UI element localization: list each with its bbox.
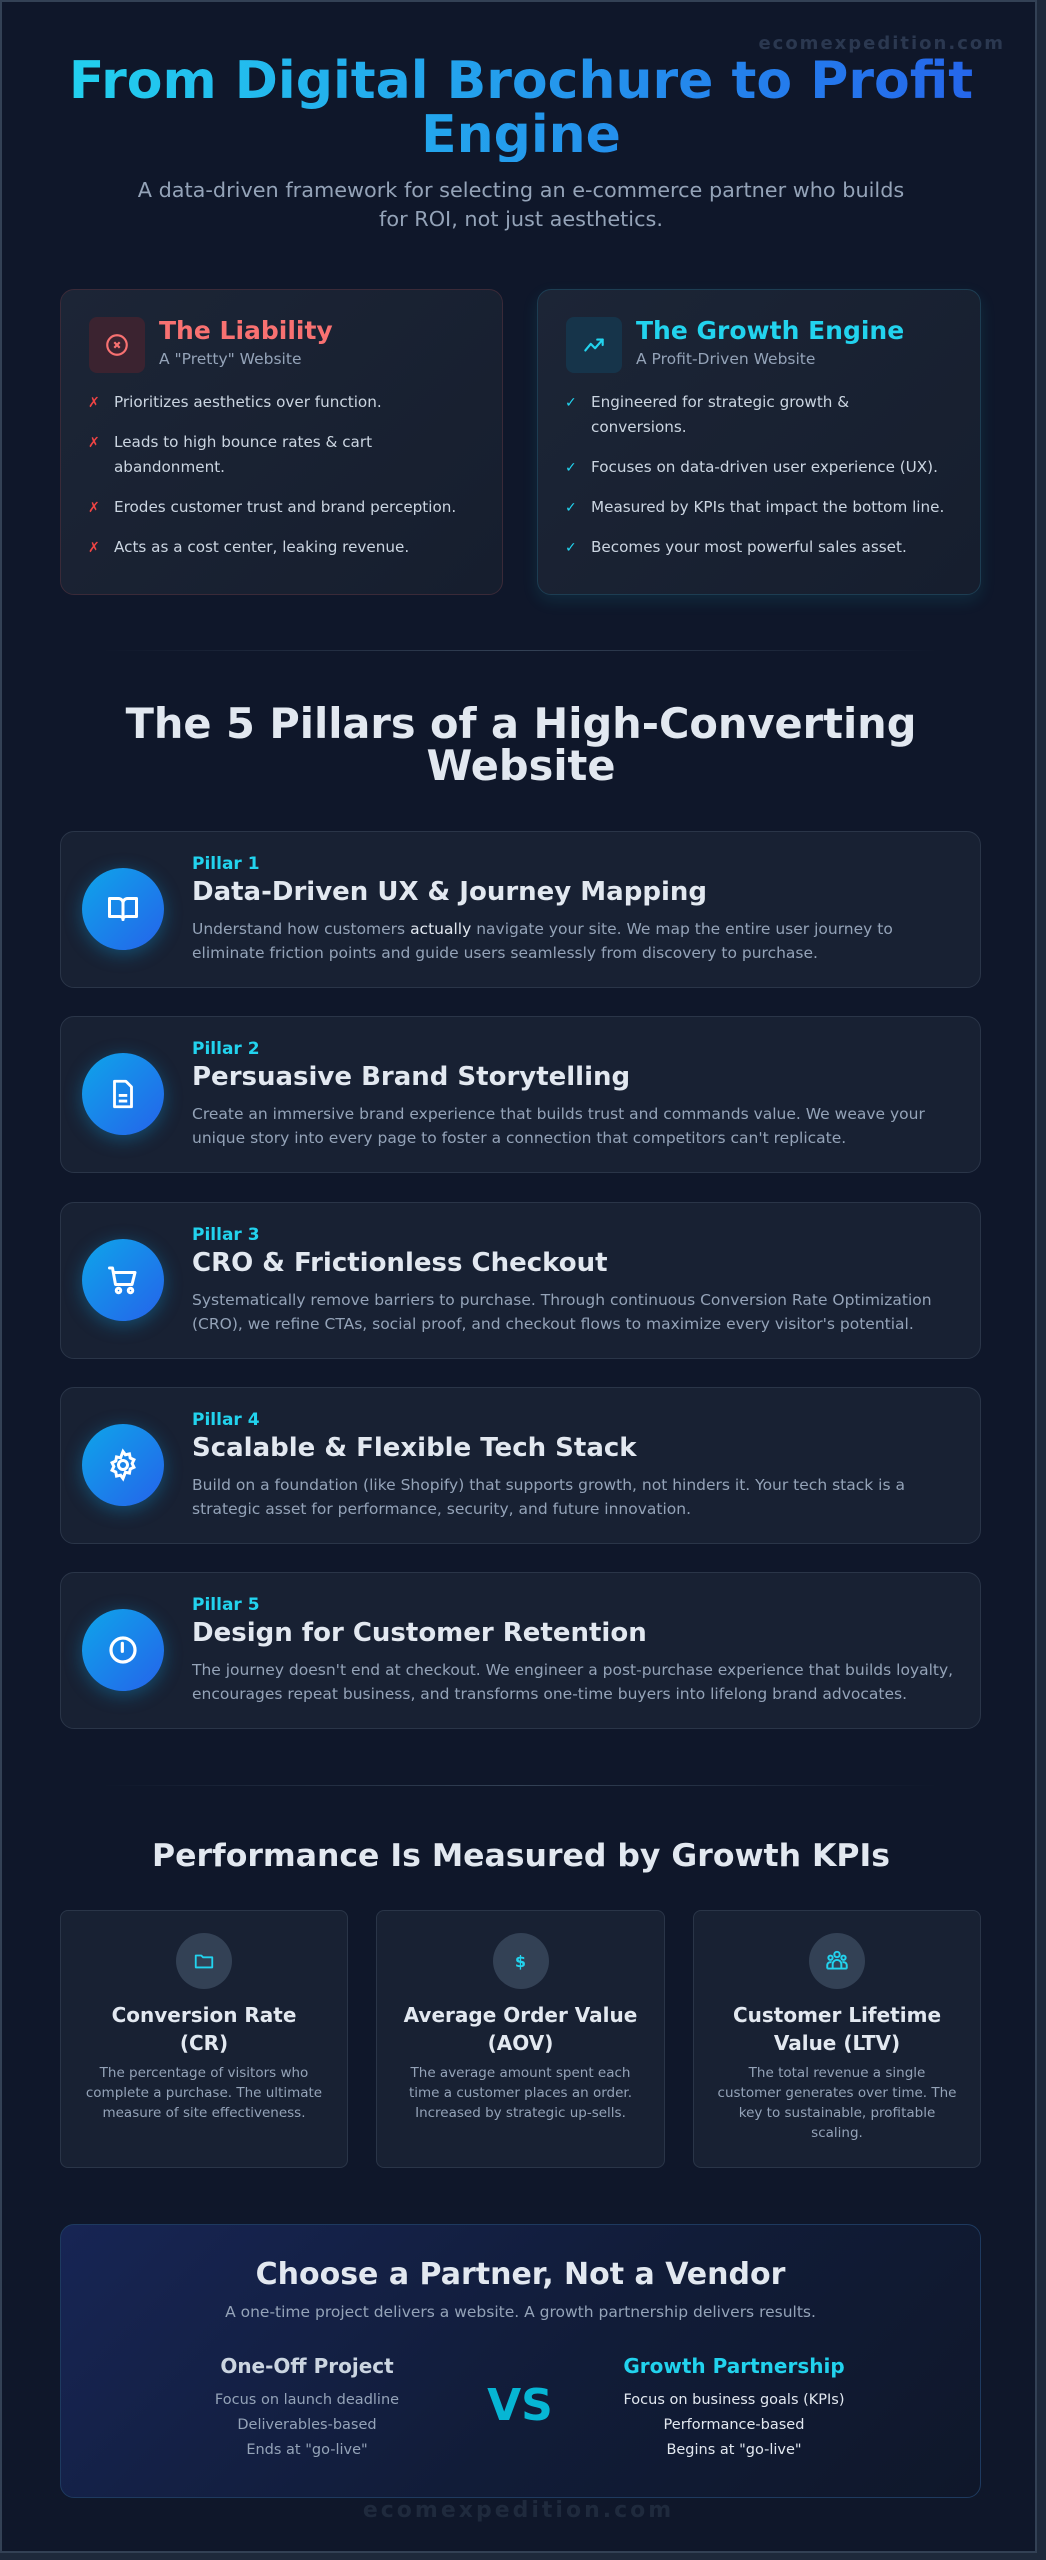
list: growth points: ✓ (565, 460, 577, 476)
heading: partner: Choose a Partner, Not a Vendor (256, 2257, 785, 2292)
panel: KPI conversion rate: The percentage of visitors who complete a purchase. The ultimate measure of site effectiveness. (86, 2065, 322, 2121)
icon: dollar: $ (515, 1952, 526, 1970)
panel: liability (60, 289, 503, 595)
panel: pillar 3: CRO & Frictionless Checkout (192, 1248, 608, 1278)
panel: KPI AOV: Average Order Value (404, 2003, 637, 2027)
heading: 5 pillars: The 5 Pillars of a High-Converting Website (126, 699, 916, 790)
panel: pillar 3: Pillar 3 (192, 1225, 260, 1245)
panel: pillar 5: Design for Customer Retention (192, 1618, 647, 1648)
list: growth points (565, 393, 944, 556)
list: liability points: Prioritizes aesthetics over function. (114, 393, 382, 411)
panel: KPI conversion rate: (CR) (180, 2031, 228, 2055)
list: growth points: Measured by KPIs that impact the bottom line. (591, 498, 944, 516)
icon: users (809, 1933, 865, 1989)
panel: KPI AOV: (AOV) (488, 2031, 553, 2055)
VS: VS (487, 2380, 553, 2431)
column: growth partnership: Growth Partnership (623, 2354, 845, 2378)
column: one-off project (215, 2354, 399, 2458)
panel: pillar 5 (60, 1572, 981, 1729)
icon: book (82, 868, 164, 950)
heading: liability: The Liability (159, 316, 333, 345)
list: growth points: Engineered for strategic growth & (591, 393, 849, 411)
icon: retention (82, 1609, 164, 1691)
list: growth points: Becomes your most powerful sales asset. (591, 538, 907, 556)
panel: pillar 4: Scalable & Flexible Tech Stack (192, 1433, 637, 1463)
list: growth points: ✓ (565, 500, 577, 516)
icon: document (82, 1053, 164, 1135)
list: growth points: ✓ (565, 395, 577, 411)
panel: KPI AOV (376, 1910, 665, 2168)
panel: pillar 1 (60, 831, 981, 988)
panel: pillar 1: Pillar 1 (192, 854, 260, 874)
panel: KPI conversion rate: Conversion Rate (112, 2003, 296, 2027)
column: one-off project: Focus on launch deadline (215, 2392, 399, 2408)
icon: trend (566, 317, 622, 373)
panel: pillar 2 (60, 1016, 981, 1173)
panel: pillar 1: Understand how customers actually navigate your site. We map the entire user journey to eliminate friction points and guide users seamlessly from discovery to purchase. (192, 920, 893, 962)
panel: pillar 5: Pillar 5 (192, 1595, 260, 1615)
icon: folder (176, 1933, 232, 1989)
panel: KPI conversion rate (60, 1910, 348, 2168)
icon: x circle (89, 317, 145, 373)
panel: pillar 1: Data-Driven UX & Journey Mapping (192, 877, 707, 907)
column: growth partnership: Begins at "go-live" (666, 2442, 802, 2458)
icon: cart (82, 1239, 164, 1321)
column: growth partnership: Performance-based (664, 2417, 804, 2433)
title: From Digital Brochure to Profit Engine (69, 51, 973, 165)
panel: partner vs vendor (60, 2224, 981, 2498)
panel: pillar 2: Pillar 2 (192, 1039, 260, 1059)
watermark top: ecomexpedition.com (758, 33, 1005, 54)
heading: KPIs: Performance Is Measured by Growth KPIs (152, 1838, 890, 1874)
column: one-off project: Ends at "go-live" (246, 2442, 368, 2458)
list: liability points: Erodes customer trust and brand perception. (114, 498, 456, 516)
subheading: A one-time project delivers a website. A growth partnership delivers results. (225, 2303, 816, 2321)
icon: dollar (492, 1933, 548, 1989)
panel: growth engine: A Profit-Driven Website (636, 350, 815, 368)
watermark bottom: ecomexpedition.com (363, 2498, 674, 2523)
panel: pillar 3: Systematically remove barriers to purchase. Through continuous Conversion Rate Optimization (CRO), we refine CTAs, social proof, and checkout flows to maximize every visitor's potential. (192, 1291, 932, 1333)
list: liability points: ✗ (88, 395, 100, 411)
heading: growth engine: The Growth Engine (636, 316, 904, 345)
list: growth points: ✓ (565, 540, 577, 556)
list: growth points: Focuses on data-driven user experience (UX). (591, 458, 938, 476)
list: liability points (88, 393, 456, 556)
column: one-off project: One-Off Project (220, 2354, 394, 2378)
panel: KPI LTV: Value (LTV) (774, 2031, 900, 2055)
column: one-off project: Deliverables-based (237, 2417, 377, 2433)
panel: pillar 4: Build on a foundation (like Shopify) that supports growth, not hinders it. Your tech stack is a strategic asset for performance, security, and future innovation. (192, 1476, 905, 1518)
panel: KPI LTV: The total revenue a single customer generates over time. The key to sustainable, profitable scaling. (718, 2065, 956, 2141)
panel: pillar 2: Persuasive Brand Storytelling (192, 1062, 630, 1092)
panel: KPI LTV (693, 1910, 981, 2168)
panel: growth engine (537, 289, 981, 595)
icon: gear (82, 1424, 164, 1506)
list: liability points: ✗ (88, 500, 100, 516)
panel: pillar 4 (60, 1387, 981, 1544)
panel: pillar 5: The journey doesn't end at checkout. We engineer a post-purchase experience that builds loyalty, encourages repeat business, and transforms one-time buyers into lifelong brand advocates. (192, 1661, 953, 1703)
list: growth points: conversions. (591, 418, 687, 436)
panel: KPI LTV: Customer Lifetime (733, 2003, 941, 2027)
column: growth partnership (623, 2354, 845, 2458)
list: liability points: Leads to high bounce rates & cart abandonment. (114, 433, 372, 476)
subtitle: A data-driven framework for selecting an e-commerce partner who builds for ROI, not just aesthetics. (138, 178, 904, 231)
panel: pillar 3 (60, 1202, 981, 1359)
panel: liability: A "Pretty" Website (159, 350, 301, 368)
panel: pillar 2: Create an immersive brand experience that builds trust and commands value. We weave your unique story into every page to foster a connection that competitors can't replicate. (192, 1105, 925, 1147)
list: liability points: ✗ (88, 435, 100, 451)
panel: KPI AOV: The average amount spent each time a customer places an order. Increased by strategic up-sells. (409, 2065, 632, 2121)
column: growth partnership: Focus on business goals (KPIs) (623, 2392, 845, 2408)
list: liability points: Acts as a cost center, leaking revenue. (114, 538, 409, 556)
list: liability points: ✗ (88, 540, 100, 556)
panel: pillar 4: Pillar 4 (192, 1410, 260, 1430)
